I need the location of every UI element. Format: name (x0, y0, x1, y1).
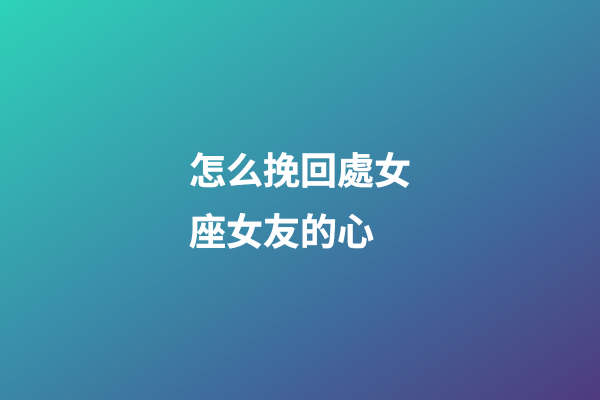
title (189, 151, 411, 253)
title: 怎么挽回處女 (189, 151, 411, 192)
title: 座女友的心 (189, 212, 374, 253)
